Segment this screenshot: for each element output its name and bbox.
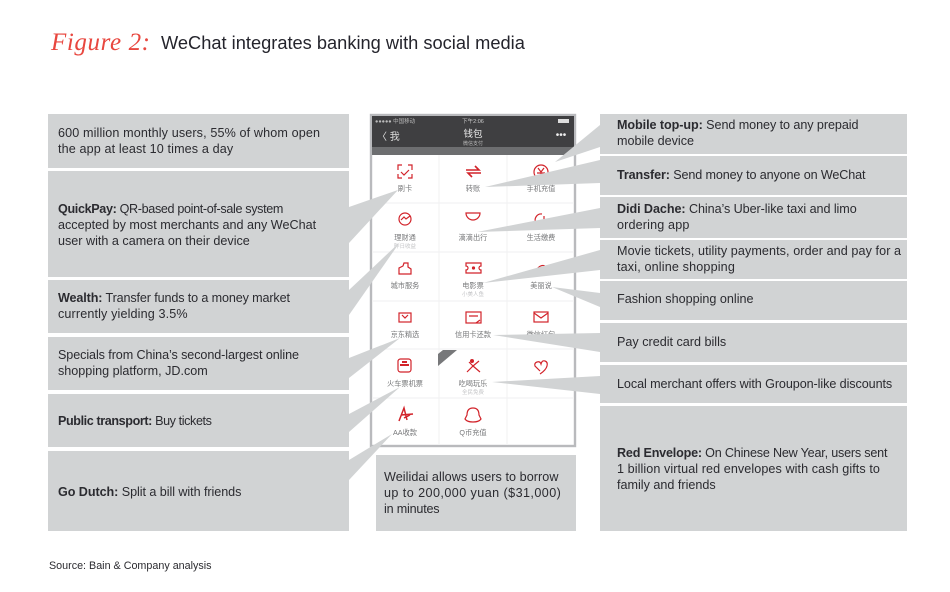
panel: Weilidai bbox=[376, 455, 576, 531]
wallet labels: 电影票 bbox=[462, 281, 484, 290]
wallet icons bbox=[398, 165, 548, 422]
panel: Wealth bbox=[48, 280, 349, 333]
panel: Credit card bills bbox=[600, 323, 907, 362]
panel: monthly users bbox=[48, 114, 349, 168]
panel: Wealth: Wealth: Transfer funds to a money market bbox=[58, 291, 290, 305]
panel: QuickPay: user with a camera on their device bbox=[58, 234, 250, 248]
panel: Go Dutch: Go Dutch: Split a bill with friends bbox=[58, 485, 241, 499]
heading text: WeChat integrates banking with social media bbox=[161, 32, 525, 53]
wallet labels: 昨日收益 bbox=[394, 242, 416, 250]
app header bar: 钱包 bbox=[463, 128, 483, 140]
wallet labels: 刷卡 bbox=[398, 184, 412, 193]
panel: Red Envelope: family and friends bbox=[617, 478, 716, 492]
panel: JD specials: Specials from China’s second-largest online bbox=[58, 348, 299, 362]
panel: Credit card bills: Pay credit card bills bbox=[617, 335, 726, 349]
wallet labels: Q币充值 bbox=[459, 428, 487, 437]
app header bar: 〈 我 bbox=[377, 131, 400, 143]
panel: QuickPay: QuickPay: QR-based point-of-sale system bbox=[58, 202, 283, 216]
app header bar: 下午2:06 bbox=[462, 117, 484, 125]
panel: Mobile top-up: Mobile top-up: Send money to any prepaid bbox=[617, 118, 858, 132]
figure label: Figure 2: bbox=[51, 29, 151, 56]
panel: Go Dutch bbox=[48, 451, 349, 531]
wallet labels: 理财通 bbox=[394, 233, 416, 242]
panel: Didi Dache: Didi Dache: China’s Uber-like taxi and limo bbox=[617, 202, 857, 216]
wallet labels: 生活缴费 bbox=[527, 233, 555, 242]
panel: Fashion shopping bbox=[600, 281, 907, 320]
wallet labels: 京东精选 bbox=[391, 330, 419, 339]
panel: Movie tickets: taxi, online shopping bbox=[617, 260, 735, 274]
source note: Source: Bain & Company analysis bbox=[49, 560, 212, 572]
wallet labels: 微信红包 bbox=[527, 330, 555, 339]
panel: Local merchant offers: Local merchant offers with Groupon-like discounts bbox=[617, 377, 892, 391]
panel: JD specials bbox=[48, 337, 349, 390]
wallet labels: 美丽说 bbox=[530, 281, 552, 290]
wallet labels: 滴滴出行 bbox=[459, 233, 487, 242]
grid lines bbox=[372, 155, 574, 445]
wallet labels: 转账 bbox=[466, 184, 480, 193]
wallet labels bbox=[387, 184, 555, 437]
panel: Local merchant offers bbox=[600, 365, 907, 403]
panel: Didi Dache: ordering app bbox=[617, 218, 690, 232]
new ribbon bbox=[438, 350, 457, 366]
panel: Mobile top-up bbox=[600, 114, 907, 154]
panel: Red Envelope bbox=[600, 406, 907, 531]
panel: Weilidai: Weilidai allows users to borrow bbox=[384, 470, 559, 484]
app header bar bbox=[372, 116, 574, 155]
panel: Public transport bbox=[48, 394, 349, 447]
panel: QuickPay: accepted by most merchants and any WeChat bbox=[58, 218, 316, 232]
app header bar: 微信支付 bbox=[463, 140, 483, 147]
panel: Movie tickets: Movie tickets, utility payments, order and pay for a bbox=[617, 244, 901, 258]
panel: Red Envelope: Red Envelope: On Chinese New Year, users sent bbox=[617, 446, 887, 460]
title bbox=[50, 29, 525, 56]
panel: Fashion shopping: Fashion shopping online bbox=[617, 292, 754, 306]
wallet labels: 吃喝玩乐 bbox=[459, 379, 487, 388]
panel: Wealth: currently yielding 3.5% bbox=[58, 307, 188, 321]
panel: Didi Dache bbox=[600, 197, 907, 238]
wallet labels: 信用卡还款 bbox=[455, 330, 491, 339]
wallet labels: 手机充值 bbox=[527, 184, 555, 193]
panel: Movie tickets bbox=[600, 240, 907, 279]
panel: monthly users: 600 million monthly users, 55% of whom open bbox=[58, 126, 320, 140]
wallet labels: 城市服务 bbox=[391, 281, 419, 290]
app header bar: ●●●●● 中国移动 bbox=[375, 117, 416, 125]
wallet labels: 火车票机票 bbox=[387, 379, 423, 388]
panel: QuickPay bbox=[48, 171, 349, 277]
panel: monthly users: the app at least 10 times a day bbox=[58, 142, 233, 156]
wallet labels: AA收款 bbox=[393, 428, 417, 437]
panel: Mobile top-up: mobile device bbox=[617, 134, 694, 148]
panel: Weilidai: in minutes bbox=[384, 502, 439, 516]
panel: JD specials: shopping platform, JD.com bbox=[58, 364, 208, 378]
panel: Transfer bbox=[600, 156, 907, 195]
panel: Weilidai: up to 200,000 yuan ($31,000) bbox=[384, 486, 561, 500]
panel: Red Envelope: 1 billion virtual red envelopes with cash gifts to bbox=[617, 462, 880, 476]
app header bar: ••• bbox=[556, 130, 567, 141]
wallet labels: 全民免费 bbox=[462, 388, 484, 396]
panel: Public transport: Public transport: Buy tickets bbox=[58, 414, 212, 428]
wallet labels: 小美人鱼 bbox=[462, 290, 484, 298]
panel: Transfer: Transfer: Send money to anyone on WeChat bbox=[617, 168, 865, 182]
